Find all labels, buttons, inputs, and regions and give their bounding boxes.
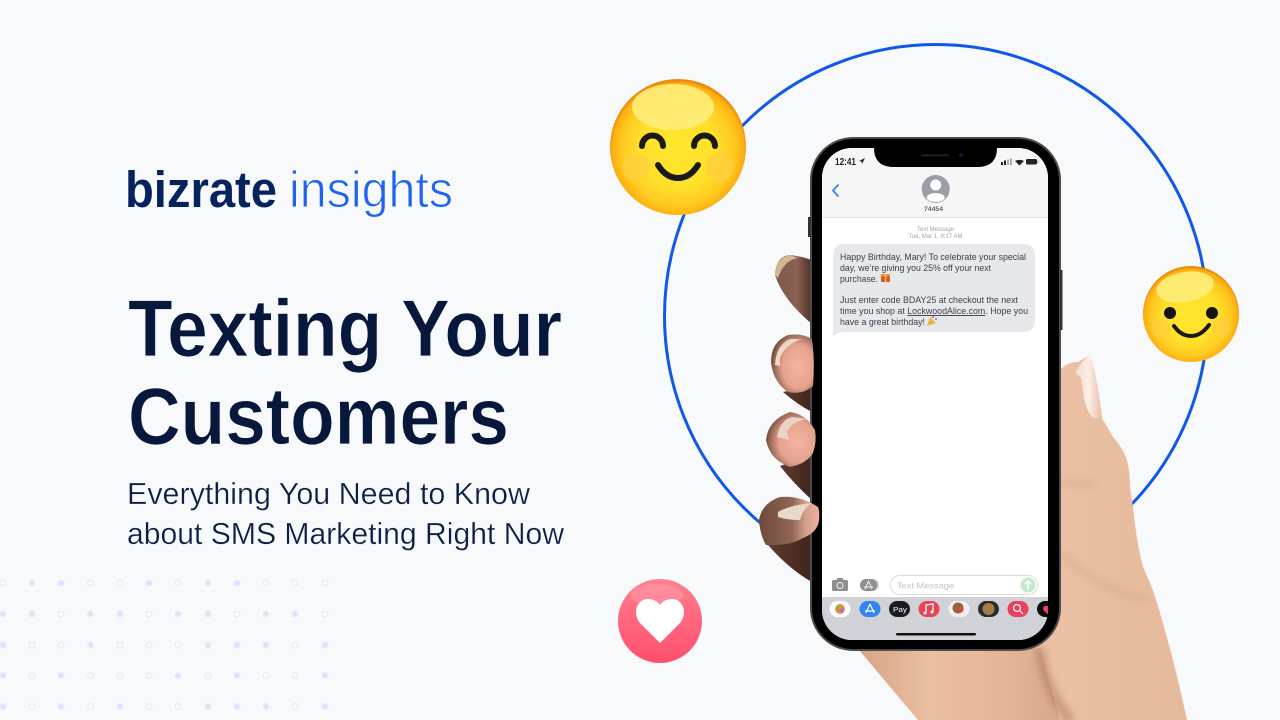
app store app xyxy=(860,601,880,617)
header bar xyxy=(822,148,1048,217)
emoji: smile xyxy=(1143,266,1239,362)
photos app xyxy=(830,601,850,617)
finger one nail xyxy=(775,255,798,278)
message bubble: have a great birthday! xyxy=(840,317,925,327)
logo: bizrate insights: insights xyxy=(289,161,453,218)
message bubble: Happy Birthday, Mary! To celebrate your special xyxy=(840,252,1026,262)
dot pattern xyxy=(0,580,328,709)
finger four xyxy=(759,497,819,545)
blue ring xyxy=(664,44,1208,588)
screen xyxy=(822,148,1048,640)
camera icon xyxy=(832,578,848,591)
search app xyxy=(1008,601,1028,617)
icon: gift xyxy=(881,274,890,282)
title xyxy=(128,284,562,462)
subtitle: about SMS Marketing Right Now xyxy=(127,516,565,551)
message bubble: time you shop at LockwoodAlice.com. Hope you xyxy=(840,306,1028,316)
home indicator xyxy=(896,633,976,636)
title: Texting Your xyxy=(128,284,562,374)
hand: palm and thumb xyxy=(860,355,1187,720)
message input: Text Message xyxy=(897,580,954,590)
message timestamp xyxy=(908,227,963,240)
logo: bizrate insights xyxy=(125,161,453,218)
notch xyxy=(874,148,997,167)
memoji app two xyxy=(978,601,999,617)
phone xyxy=(808,137,1062,651)
apple pay app xyxy=(889,601,910,617)
icon: party popper xyxy=(927,316,937,326)
icon: heart badge xyxy=(618,579,702,663)
message bubble xyxy=(832,244,1035,335)
apple pay app: Pay xyxy=(893,605,907,614)
logo: bizrate insights: bizrate xyxy=(125,161,277,218)
message timestamp: Text Message xyxy=(917,227,955,233)
app dock xyxy=(822,597,1048,640)
message bubble: day, we’re giving you 25% off your next xyxy=(840,263,991,273)
subtitle: Everything You Need to Know xyxy=(127,476,531,511)
message bubble: Just enter code BDAY25 at checkout the next xyxy=(840,295,1018,305)
hand: finger bases behind phone xyxy=(768,255,812,582)
contact number: 74454 xyxy=(924,207,944,213)
title: Customers xyxy=(128,372,509,462)
message input xyxy=(890,576,1038,594)
phone body xyxy=(810,137,1061,651)
hand: fingertips over phone xyxy=(759,255,819,545)
back arrow xyxy=(833,184,838,196)
message bubble: purchase. xyxy=(840,274,878,284)
message timestamp: Tue, Mar 1, 9:17 AM xyxy=(908,234,963,240)
heart app xyxy=(1037,601,1048,617)
finger two xyxy=(771,334,814,393)
thumb nail xyxy=(1075,355,1102,418)
finger three xyxy=(766,412,816,467)
subtitle xyxy=(127,476,565,551)
side buttons xyxy=(808,217,811,237)
app store button xyxy=(860,579,879,591)
emoji: smiling closed eyes xyxy=(610,79,746,215)
memoji app one xyxy=(948,601,970,617)
status bar: 12:41 xyxy=(835,157,856,168)
status bar xyxy=(835,157,1038,168)
contact avatar xyxy=(922,175,950,203)
music app xyxy=(918,601,940,617)
